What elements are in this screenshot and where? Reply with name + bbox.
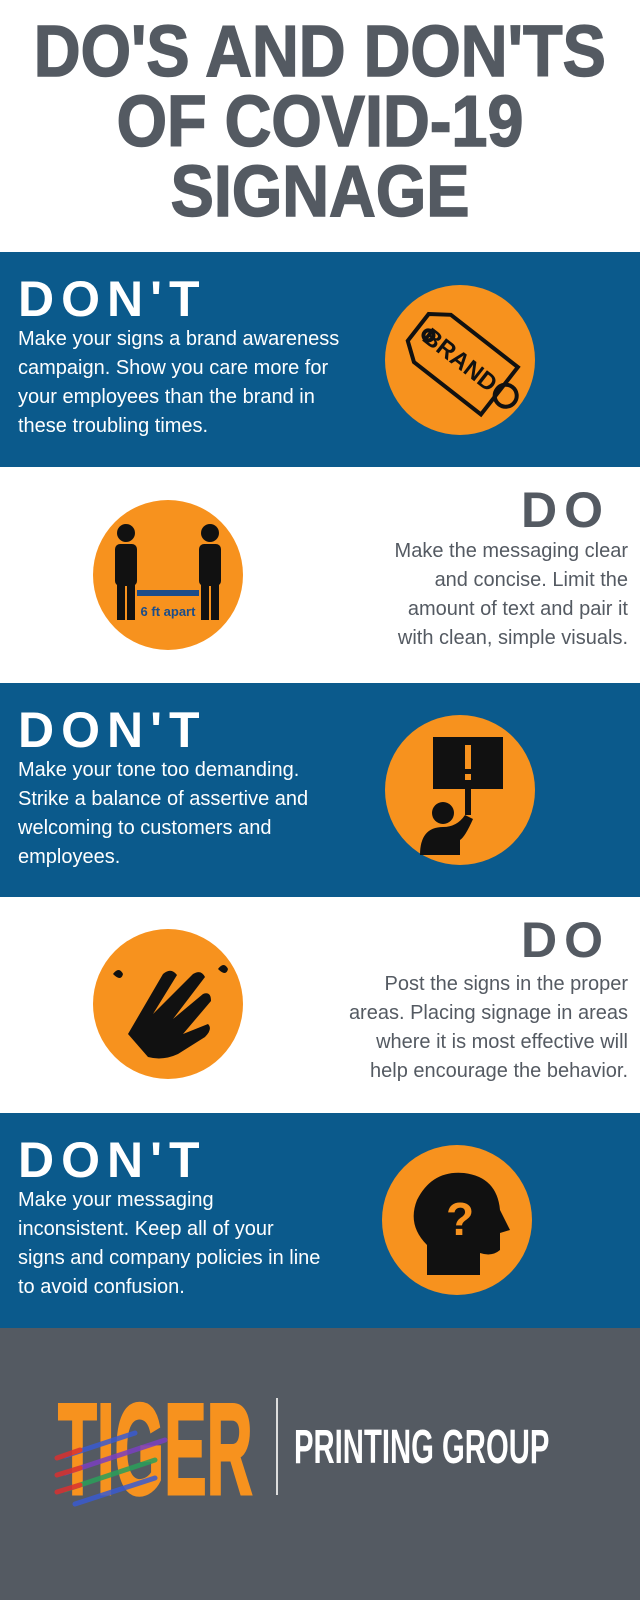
text block: to avoid confusion. <box>18 1276 185 1298</box>
icon: head question <box>382 1145 532 1295</box>
text block: Make the messaging clear <box>395 540 628 562</box>
icon: protest sign <box>385 715 535 865</box>
text block: inconsistent. Keep all of your <box>18 1218 274 1240</box>
title <box>34 12 606 232</box>
text block: signs and company policies in line <box>18 1247 320 1269</box>
text block: Make your signs a brand awareness <box>18 328 339 350</box>
text block: Strike a balance of assertive and <box>18 788 308 810</box>
panel: don't brand <box>0 252 640 467</box>
text block <box>18 759 308 868</box>
icon: brand tag: BRAND <box>417 323 502 398</box>
text block: your employees than the brand in <box>18 386 315 408</box>
heading: don't: DON'T <box>18 271 207 327</box>
icon: head question: ? <box>446 1193 474 1245</box>
icon: 6 ft apart: 6 ft apart <box>141 604 196 619</box>
text block: amount of text and pair it <box>408 598 628 620</box>
text block: Make your messaging <box>18 1189 214 1211</box>
title: OF COVID-19 <box>117 82 523 162</box>
text block: where it is most effective will <box>376 1031 628 1053</box>
text block: welcoming to customers and <box>18 817 271 839</box>
logo divider <box>276 1398 278 1495</box>
text block: with clean, simple visuals. <box>398 627 628 649</box>
footer: logo <box>0 1328 640 1600</box>
logo: printing group: PRINTING GROUP <box>294 1421 549 1474</box>
title: DO'S AND DON'TS <box>34 12 606 92</box>
text block: Post the signs in the proper <box>385 973 628 995</box>
icon: 6 ft apart <box>93 500 243 650</box>
panel: do proper areas <box>0 897 640 1113</box>
panel: do clear <box>0 467 640 683</box>
text block <box>349 973 628 1082</box>
text block: Make your tone too demanding. <box>18 759 299 781</box>
heading: do: DO <box>521 912 610 968</box>
text block <box>18 1189 320 1298</box>
logo: color streaks <box>54 1430 168 1506</box>
heading: don't: DON'T <box>18 1132 207 1188</box>
text block: employees. <box>18 846 120 868</box>
icon: brand tag <box>385 285 535 435</box>
text block <box>395 540 628 649</box>
panel: don't inconsistent <box>0 1113 640 1328</box>
heading: do: DO <box>521 482 610 538</box>
logo: tiger: TIGER <box>58 1376 253 1522</box>
text block: campaign. Show you care more for <box>18 357 328 379</box>
text block: areas. Placing signage in areas <box>349 1002 628 1024</box>
text block: help encourage the behavior. <box>370 1060 628 1082</box>
text block: and concise. Limit the <box>435 569 628 591</box>
title: SIGNAGE <box>171 152 469 232</box>
heading: don't: DON'T <box>18 702 207 758</box>
panel: don't demanding <box>0 683 640 897</box>
icon: washing hands <box>93 929 243 1079</box>
text block: these troubling times. <box>18 415 208 437</box>
text block <box>18 328 339 437</box>
